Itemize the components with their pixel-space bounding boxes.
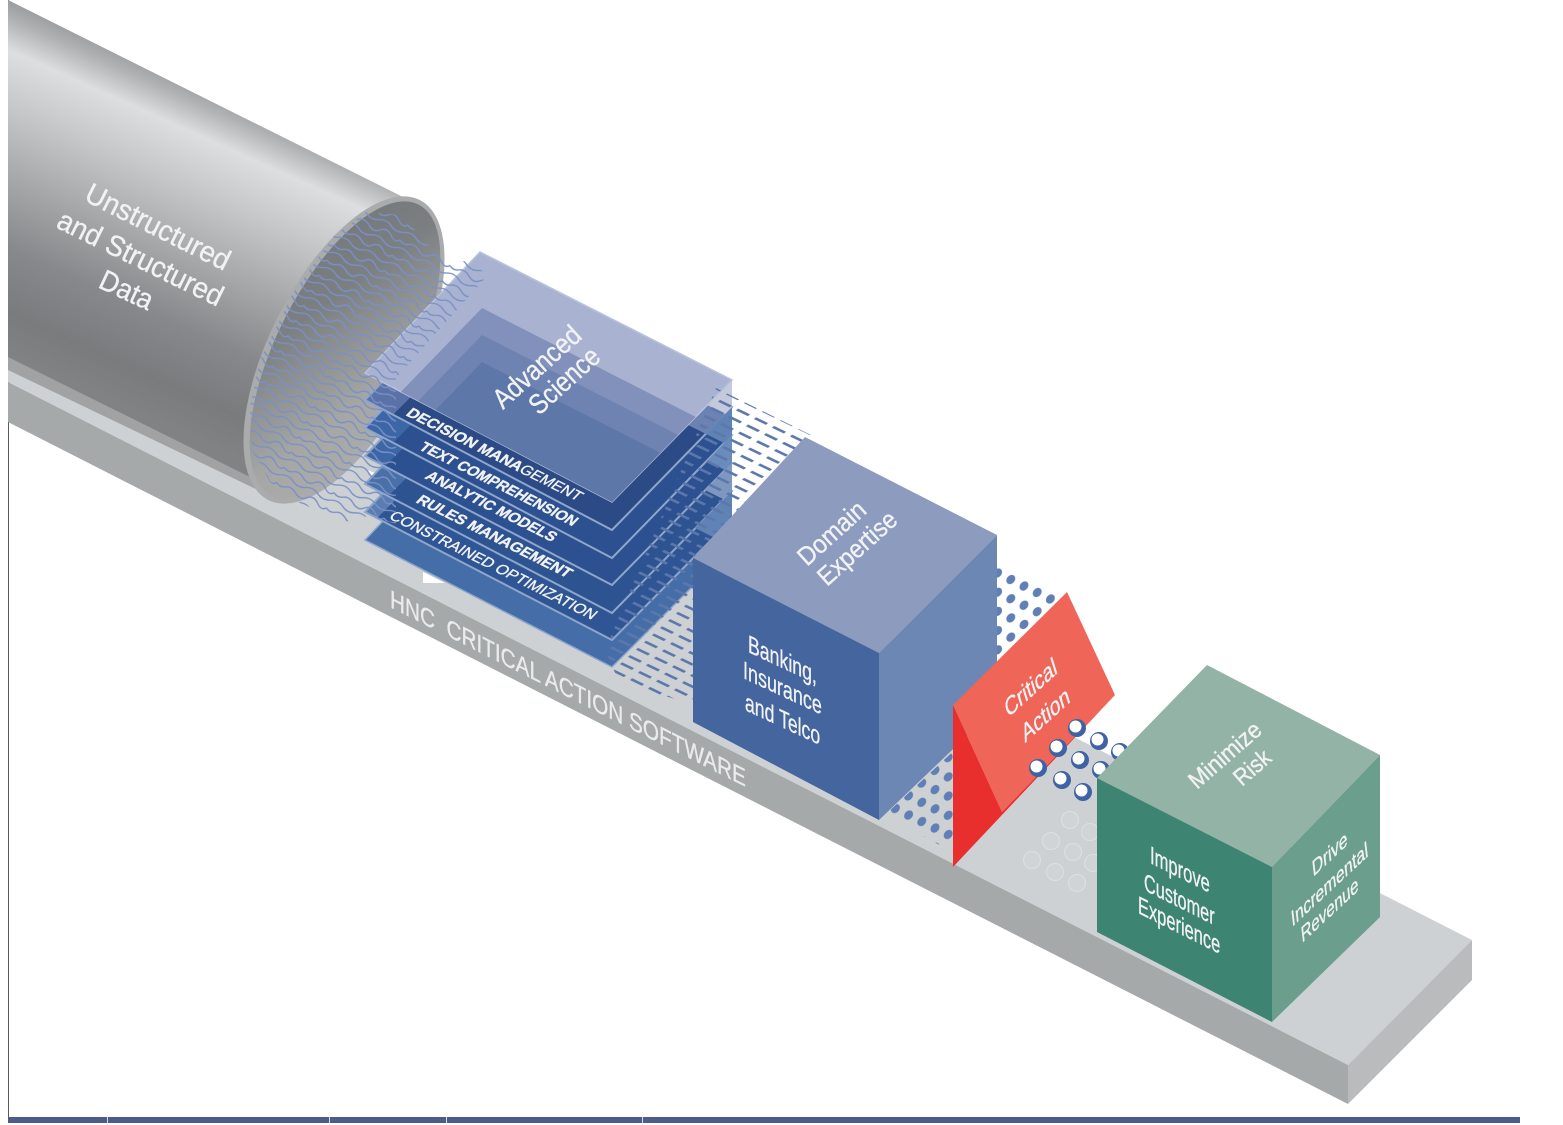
left border line bbox=[8, 0, 9, 1118]
output balls bbox=[1029, 719, 1129, 801]
platform top surface bbox=[8, 370, 1472, 1065]
cube left face bbox=[693, 558, 879, 820]
label: drive incremental revenue: Revenue bbox=[1300, 872, 1360, 948]
pipe shadow on platform bbox=[8, 350, 285, 503]
layer: decision management bbox=[365, 307, 732, 558]
layer: constrained optimization bbox=[365, 419, 732, 667]
label: minimize risk: Minimize bbox=[1183, 716, 1267, 795]
label: banking, insurance and telco: and Telco bbox=[745, 688, 820, 751]
pipe body bbox=[8, 0, 445, 487]
layer: analytic models bbox=[365, 363, 732, 613]
top sheet bbox=[364, 251, 734, 503]
wedge face bbox=[953, 592, 1115, 812]
label: critical action: Action bbox=[1019, 681, 1073, 749]
label: domain expertise: Expertise bbox=[811, 504, 903, 591]
cube top face bbox=[693, 437, 997, 653]
heading: advanced science: Advanced bbox=[486, 319, 587, 414]
heading: advanced science: Science bbox=[522, 341, 606, 420]
cube right face bbox=[879, 535, 997, 820]
label: banking, insurance and telco: Insurance bbox=[743, 656, 822, 721]
label: critical action: Critical bbox=[1002, 652, 1060, 724]
label: drive incremental revenue: Incremental bbox=[1290, 838, 1369, 932]
platform front face bbox=[8, 382, 1348, 1104]
data waves flowing from pipe bbox=[250, 212, 484, 524]
platform: HNC Critical Action Software bbox=[8, 350, 1472, 1104]
layer: top dark bbox=[365, 280, 732, 530]
dots before critical action, lower bbox=[885, 745, 960, 850]
cube: outcomes bbox=[1097, 665, 1380, 1022]
layer labels bbox=[385, 406, 601, 623]
layer labels: CONSTRAINED OPTIMIZATION bbox=[385, 509, 601, 623]
pipe label: Data bbox=[94, 264, 159, 317]
pipe label: Unstructured bbox=[80, 178, 235, 277]
label: drive incremental revenue: Drive bbox=[1311, 826, 1349, 882]
cube right face bbox=[1272, 755, 1380, 1022]
pipe: unstructured and structured data bbox=[8, 0, 486, 533]
label: improve customer experience: Experience bbox=[1138, 891, 1220, 960]
white gaps behind stack bbox=[368, 391, 390, 480]
cube left face bbox=[1097, 778, 1272, 1022]
wedge: critical action bbox=[953, 592, 1115, 867]
platform end face bbox=[1348, 940, 1472, 1104]
platform label: HNC CRITICAL ACTION SOFTWARE bbox=[390, 585, 746, 793]
label: critical action bbox=[1002, 652, 1073, 749]
pipe rim bbox=[202, 167, 486, 533]
label: banking, insurance and telco: Banking, bbox=[748, 630, 817, 690]
cube top face bbox=[1097, 665, 1380, 867]
white notch under stack bbox=[423, 572, 445, 583]
light layer tips on the right bbox=[688, 380, 732, 537]
pipe interior bbox=[211, 174, 479, 526]
bottom bar bbox=[8, 1117, 1520, 1123]
label: improve customer experience: Improve bbox=[1150, 841, 1210, 899]
wedge side bbox=[953, 695, 1115, 867]
dash field between stack and domain cube bbox=[605, 388, 815, 705]
label: improve customer experience: Customer bbox=[1144, 868, 1215, 931]
layer labels: TEXT COMPREHENSION bbox=[415, 440, 582, 529]
layer labels: DECISION MANAGEMENT bbox=[402, 406, 587, 504]
layer: text comprehension bbox=[365, 335, 732, 585]
label: domain expertise: Domain bbox=[791, 494, 872, 571]
layer labels: ANALYTIC MODELS bbox=[421, 469, 561, 545]
label: minimize risk: Risk bbox=[1228, 744, 1278, 792]
dots behind domain cube, upper bbox=[955, 560, 1064, 725]
cube: domain expertise bbox=[693, 437, 997, 820]
pipe label: and Structured bbox=[52, 205, 228, 313]
layer: rules management bbox=[365, 391, 732, 640]
hollow circles fading on platform bbox=[1024, 812, 1102, 892]
label: improve customer experience bbox=[1138, 841, 1220, 960]
layer labels: RULES MANAGEMENT bbox=[412, 493, 576, 581]
layered stack: advanced science bbox=[364, 251, 734, 668]
label: banking, insurance and telco bbox=[743, 630, 822, 751]
